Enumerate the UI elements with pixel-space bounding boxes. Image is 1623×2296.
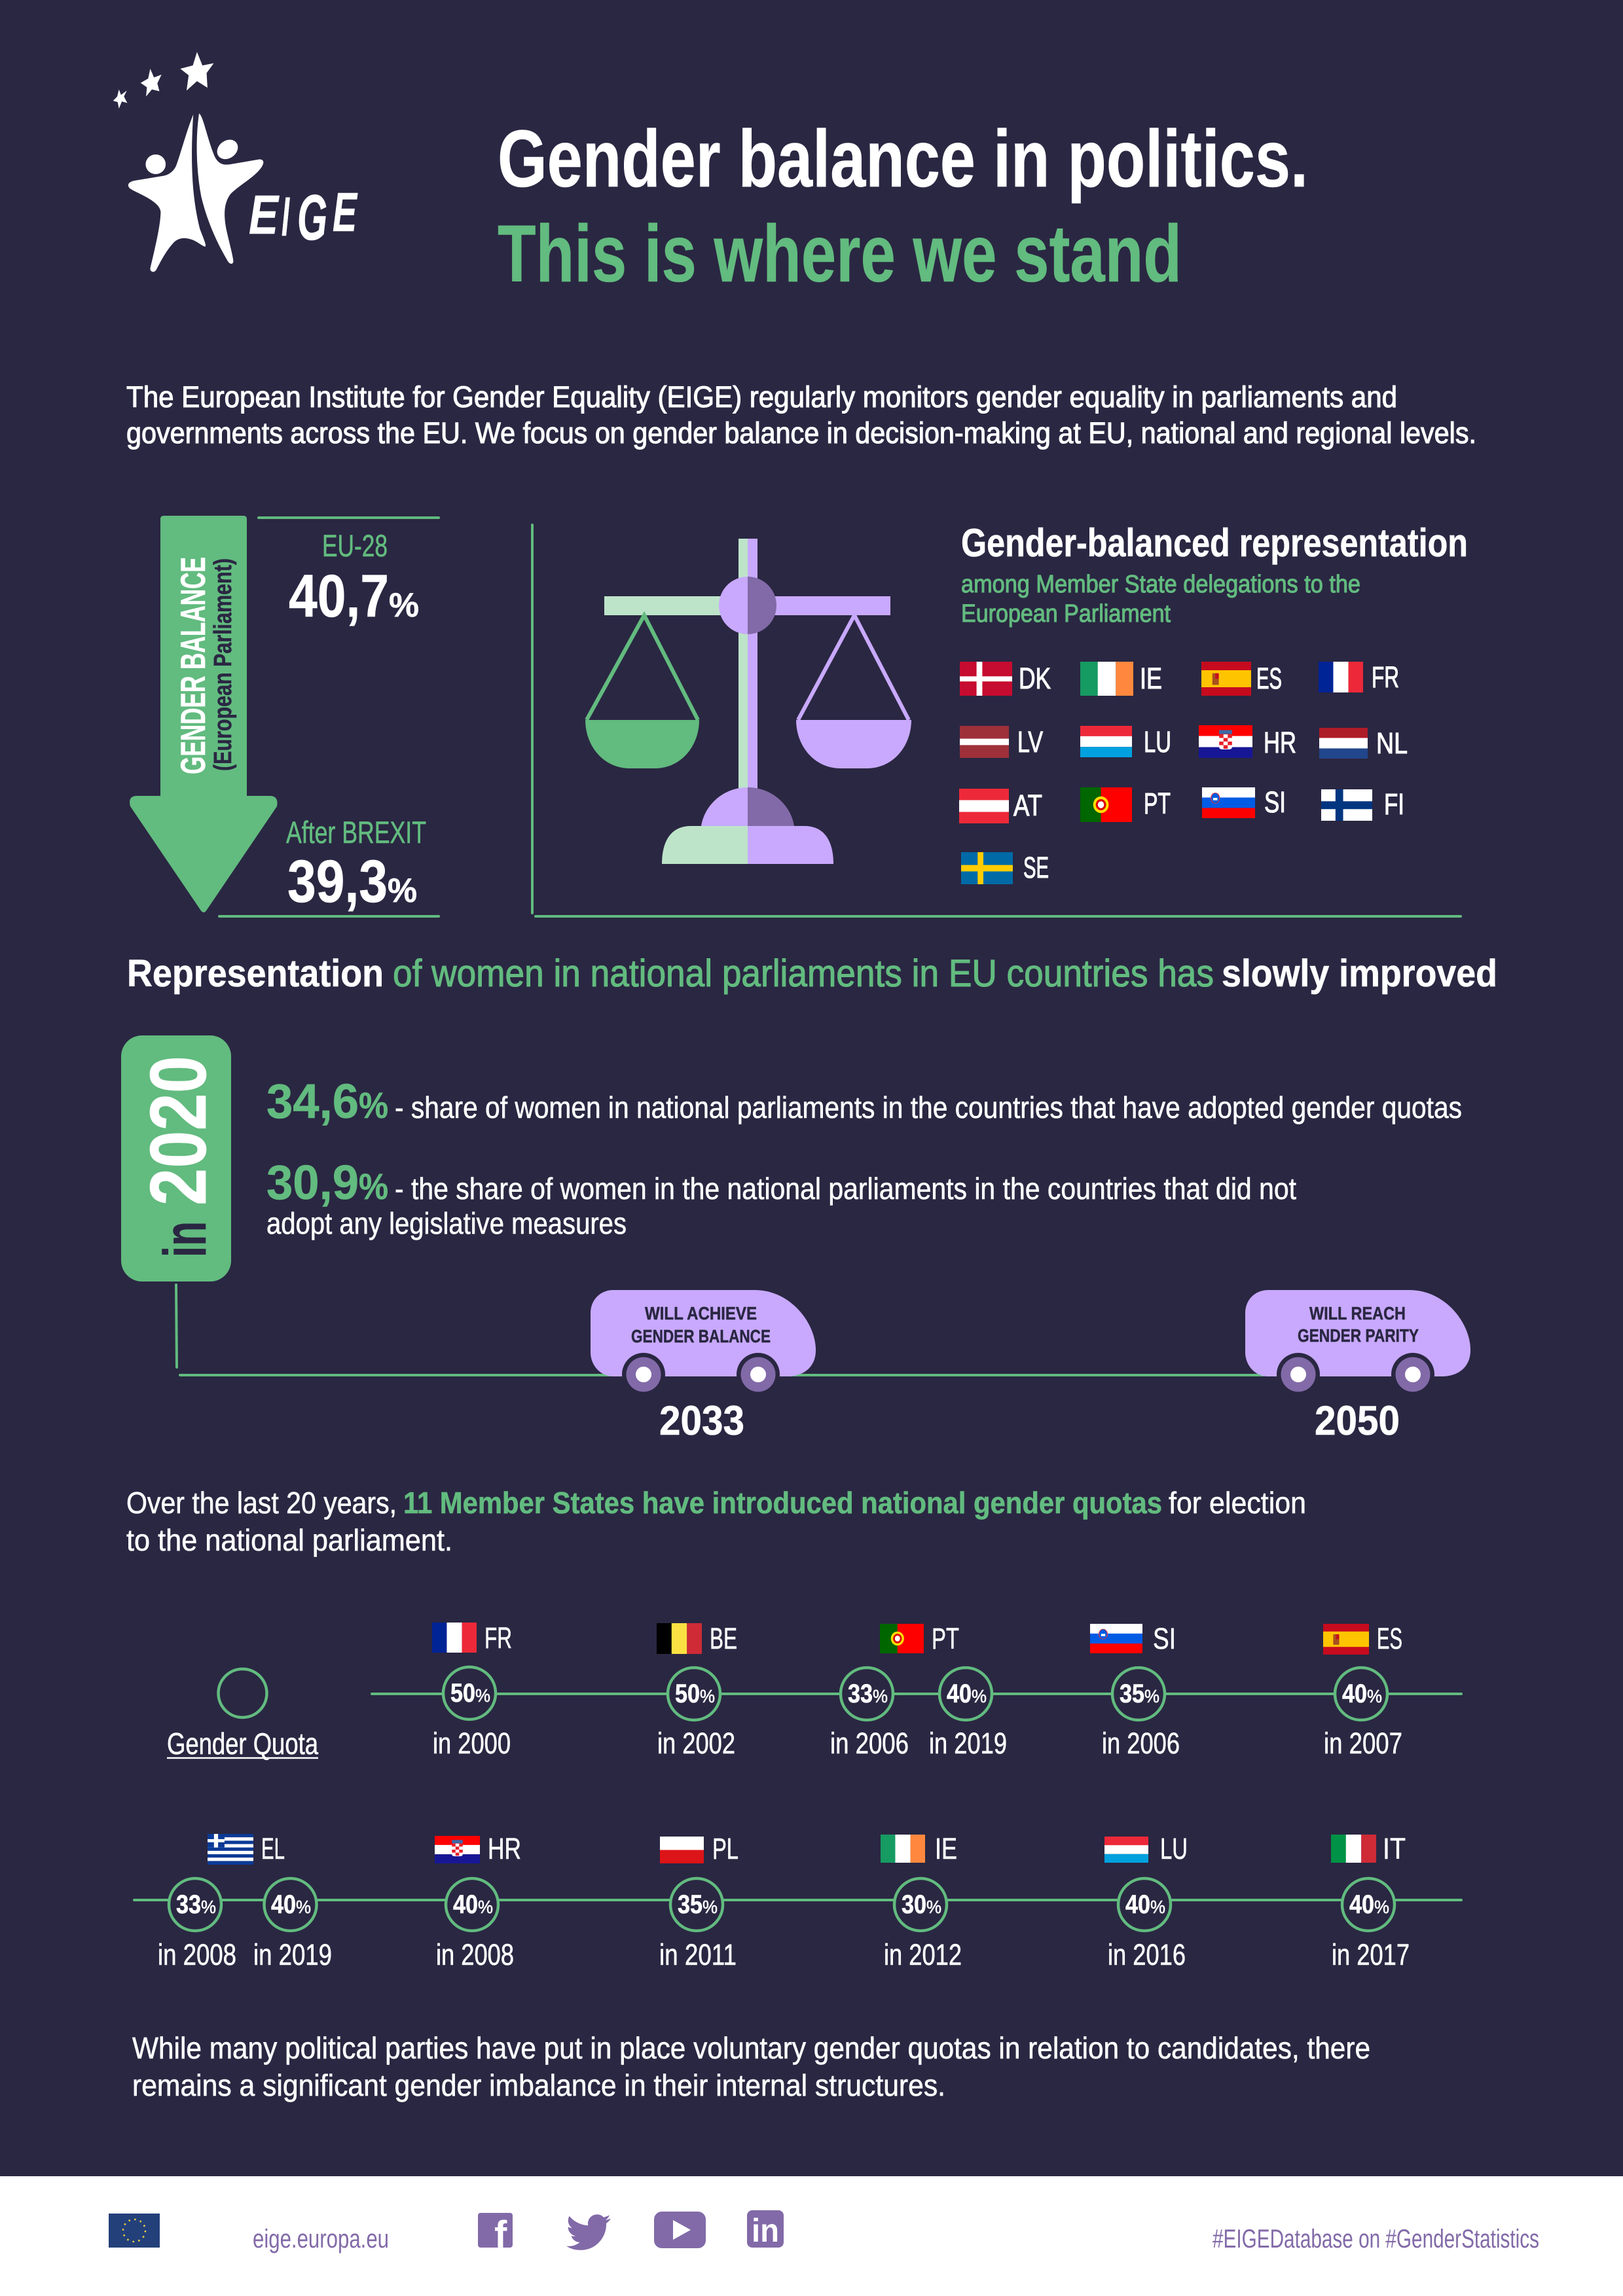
stat: after Brexit: After BREXIT [286,815,426,850]
bus: 2050 milestone: GENDER PARITY [1298,1325,1419,1346]
timeline row 1 [372,1621,1461,1760]
bus: 2033 milestone: WILL ACHIEVE [645,1303,757,1323]
FR quota: % [475,1685,490,1706]
EL quota: 40 [271,1890,296,1919]
flag list: FI [1384,787,1404,821]
icon: facebook: f [494,2214,507,2256]
stat: EU-28: % [389,586,419,624]
HR quota [435,1832,521,1971]
panel subheading: among Member State delegations to the [961,571,1360,598]
icon: youtube [654,2212,706,2248]
title: This is where we stand [498,209,1182,299]
stat: non-quota countries: adopt any legislative measures [266,1206,627,1240]
panel subheading [961,571,1360,628]
HR quota: 40 [453,1890,478,1919]
BE quota: BE [710,1622,737,1655]
PT quota [830,1622,1007,1760]
PL quota: in 2011 [659,1938,737,1971]
EL quota: in 2019 [253,1938,332,1971]
EL quota: % [201,1897,216,1917]
BE quota: % [700,1686,715,1706]
IT quota: % [1374,1897,1389,1917]
title: Gender balance in politics. [498,115,1308,204]
ES quota: in 2007 [1324,1727,1402,1760]
FR quota: in 2000 [433,1727,511,1760]
FR quota: 50 [450,1679,475,1708]
EL quota: in 2008 [158,1938,236,1971]
BE quota: in 2002 [657,1727,735,1760]
bus: 2033 milestone [591,1290,816,1444]
LU quota: 40 [1125,1890,1150,1919]
IT quota: in 2017 [1332,1938,1410,1971]
ES quota: 40 [1342,1679,1367,1708]
badge: in 2020 [121,1035,231,1282]
title [498,115,1308,299]
LU quota: % [1150,1897,1165,1917]
arrow label [174,557,237,774]
stat: quota countries: - share of women in national parliaments in the countries that have adopted gender quotas [395,1090,1462,1124]
flag list: IE [1140,662,1162,695]
IE quota: 30 [902,1890,926,1919]
section heading: slowly improved: slowly improved [1222,952,1497,995]
SI quota: % [1144,1686,1159,1706]
HR quota: HR [488,1832,521,1865]
logo wordmark: I [282,186,290,247]
icon: EU flag [109,2214,160,2248]
flag list [959,660,1408,884]
logo wordmark: E [249,184,280,245]
text: member states quotas: to the national parliament. [126,1523,452,1557]
flag list: PT [1144,787,1171,820]
panel subheading: European Parliament [961,600,1171,628]
EIGE logo [113,52,358,272]
HR quota: % [478,1897,493,1917]
PT quota: 40 [947,1679,972,1708]
text: member states quotas: Over the last 20 years, [126,1486,397,1520]
PL quota [659,1832,739,1971]
flag list: SE [1023,851,1049,884]
flag list: NL [1376,726,1408,760]
EL quota: EL [261,1832,285,1865]
bus: 2033 milestone: GENDER BALANCE [631,1326,771,1346]
SI quota: SI [1153,1622,1176,1655]
stat: EU-28: EU-28 [322,528,388,563]
LU quota: LU [1160,1832,1188,1865]
PT quota: PT [932,1622,959,1655]
flag list: HR [1264,726,1296,759]
legend: gender quota: Gender Quota [167,1727,318,1761]
flag list: LV [1017,725,1043,759]
legend: gender quota [167,1669,318,1761]
stat: quota countries: 34,6 [266,1074,359,1128]
panel heading: Gender-balanced representation [961,521,1468,565]
PT quota: % [972,1686,987,1706]
bus: 2050 milestone: 2050 [1315,1398,1400,1444]
PL quota: PL [712,1832,739,1865]
stat: EU-28: 40,7 [289,563,389,630]
logo wordmark [249,181,358,253]
ES quota [1323,1622,1402,1760]
stat: quota countries [266,1074,1462,1128]
stat: non-quota countries: - the share of women in the national parliaments in the countries that did not [395,1172,1296,1206]
stat: quota countries: % [359,1085,388,1126]
logo wordmark: G [297,181,327,253]
EL quota: % [296,1897,311,1917]
PT quota: 33 [848,1679,873,1708]
arrow label: (European Parliament) [210,558,237,771]
intro text: The European Institute for Gender Equality (EIGE) regularly monitors gender equality in parliaments and [126,380,1397,414]
badge: in 2020: in [152,1221,219,1257]
BE quota [657,1622,737,1760]
flag list: AT [1013,789,1042,822]
PT quota: % [873,1686,888,1706]
BE quota: 50 [675,1679,700,1708]
flag list: SI [1264,785,1286,819]
intro text: governments across the EU. We focus on gender balance in decision-making at EU, national and regional levels. [126,416,1476,450]
text: member states quotas [126,1486,1306,1557]
panel: gender-balanced representation [959,521,1468,884]
flag list: ES [1256,662,1282,695]
closing text [132,2031,1370,2102]
logo wordmark: E [333,181,358,243]
PL quota: 35 [678,1890,702,1919]
icon: twitter [566,2214,611,2250]
section heading: slowly improved [127,952,1497,995]
flag list: DK [1019,662,1051,695]
IE quota [881,1832,962,1971]
SI quota: in 2006 [1102,1727,1180,1760]
stat: non-quota countries: % [359,1166,388,1207]
IE quota: % [926,1897,941,1917]
HR quota: in 2008 [436,1938,514,1971]
website: eige.europa.eu [253,2225,389,2253]
icon: down arrow [130,516,278,912]
PL quota: % [702,1897,718,1917]
IT quota [1331,1832,1410,1971]
stat: EU-28 [289,528,419,630]
stat: non-quota countries [266,1155,1296,1240]
ES quota: ES [1377,1622,1402,1655]
IE quota: IE [935,1832,957,1865]
LU quota [1104,1832,1188,1971]
text: member states quotas: for election [1169,1486,1306,1520]
bus: 2050 milestone [1245,1290,1470,1444]
text: member states quotas: 11 Member States have introduced national gender quotas [403,1486,1162,1520]
footer [0,2176,1623,2296]
FR quota: FR [484,1621,512,1655]
LU quota: in 2016 [1108,1938,1186,1971]
bus: 2050 milestone: WILL REACH [1309,1303,1406,1323]
panel: gender balance arrow [130,516,439,916]
badge: in 2020: 2020 [134,1056,223,1206]
stat: non-quota countries: 30,9 [266,1155,359,1210]
PT quota: in 2019 [929,1727,1007,1760]
EL quota [158,1832,332,1971]
SI quota: 35 [1120,1679,1144,1708]
section heading: slowly improved: Representation [127,952,384,995]
stat: after Brexit: 39,3 [287,848,388,915]
ES quota: % [1367,1686,1382,1706]
arrow label: GENDER BALANCE [174,557,213,774]
IT quota: 40 [1349,1890,1374,1919]
icon: balance scale [585,539,911,864]
IE quota: in 2012 [884,1938,962,1971]
timeline row 2 [134,1832,1461,1971]
intro text [126,380,1476,450]
bus: 2033 milestone: 2033 [659,1398,744,1444]
flag list: LU [1144,725,1171,759]
closing text: remains a significant gender imbalance in their internal structures. [132,2068,945,2102]
EL quota: 33 [176,1890,201,1919]
stat: after Brexit [286,815,426,915]
SI quota [1090,1622,1180,1760]
stat: after Brexit: % [388,872,417,910]
flag list: FR [1372,660,1399,694]
closing text: While many political parties have put in place voluntary gender quotas in relation to candidates, there [132,2031,1370,2065]
IT quota: IT [1383,1832,1406,1865]
FR quota [432,1621,512,1760]
logo stars and figures [113,52,263,272]
section heading: slowly improved: of women in national parliaments in EU countries has [393,952,1214,995]
icon: facebook [478,2213,513,2256]
PT quota: in 2006 [830,1727,909,1760]
icon: linkedin: in [752,2212,779,2249]
